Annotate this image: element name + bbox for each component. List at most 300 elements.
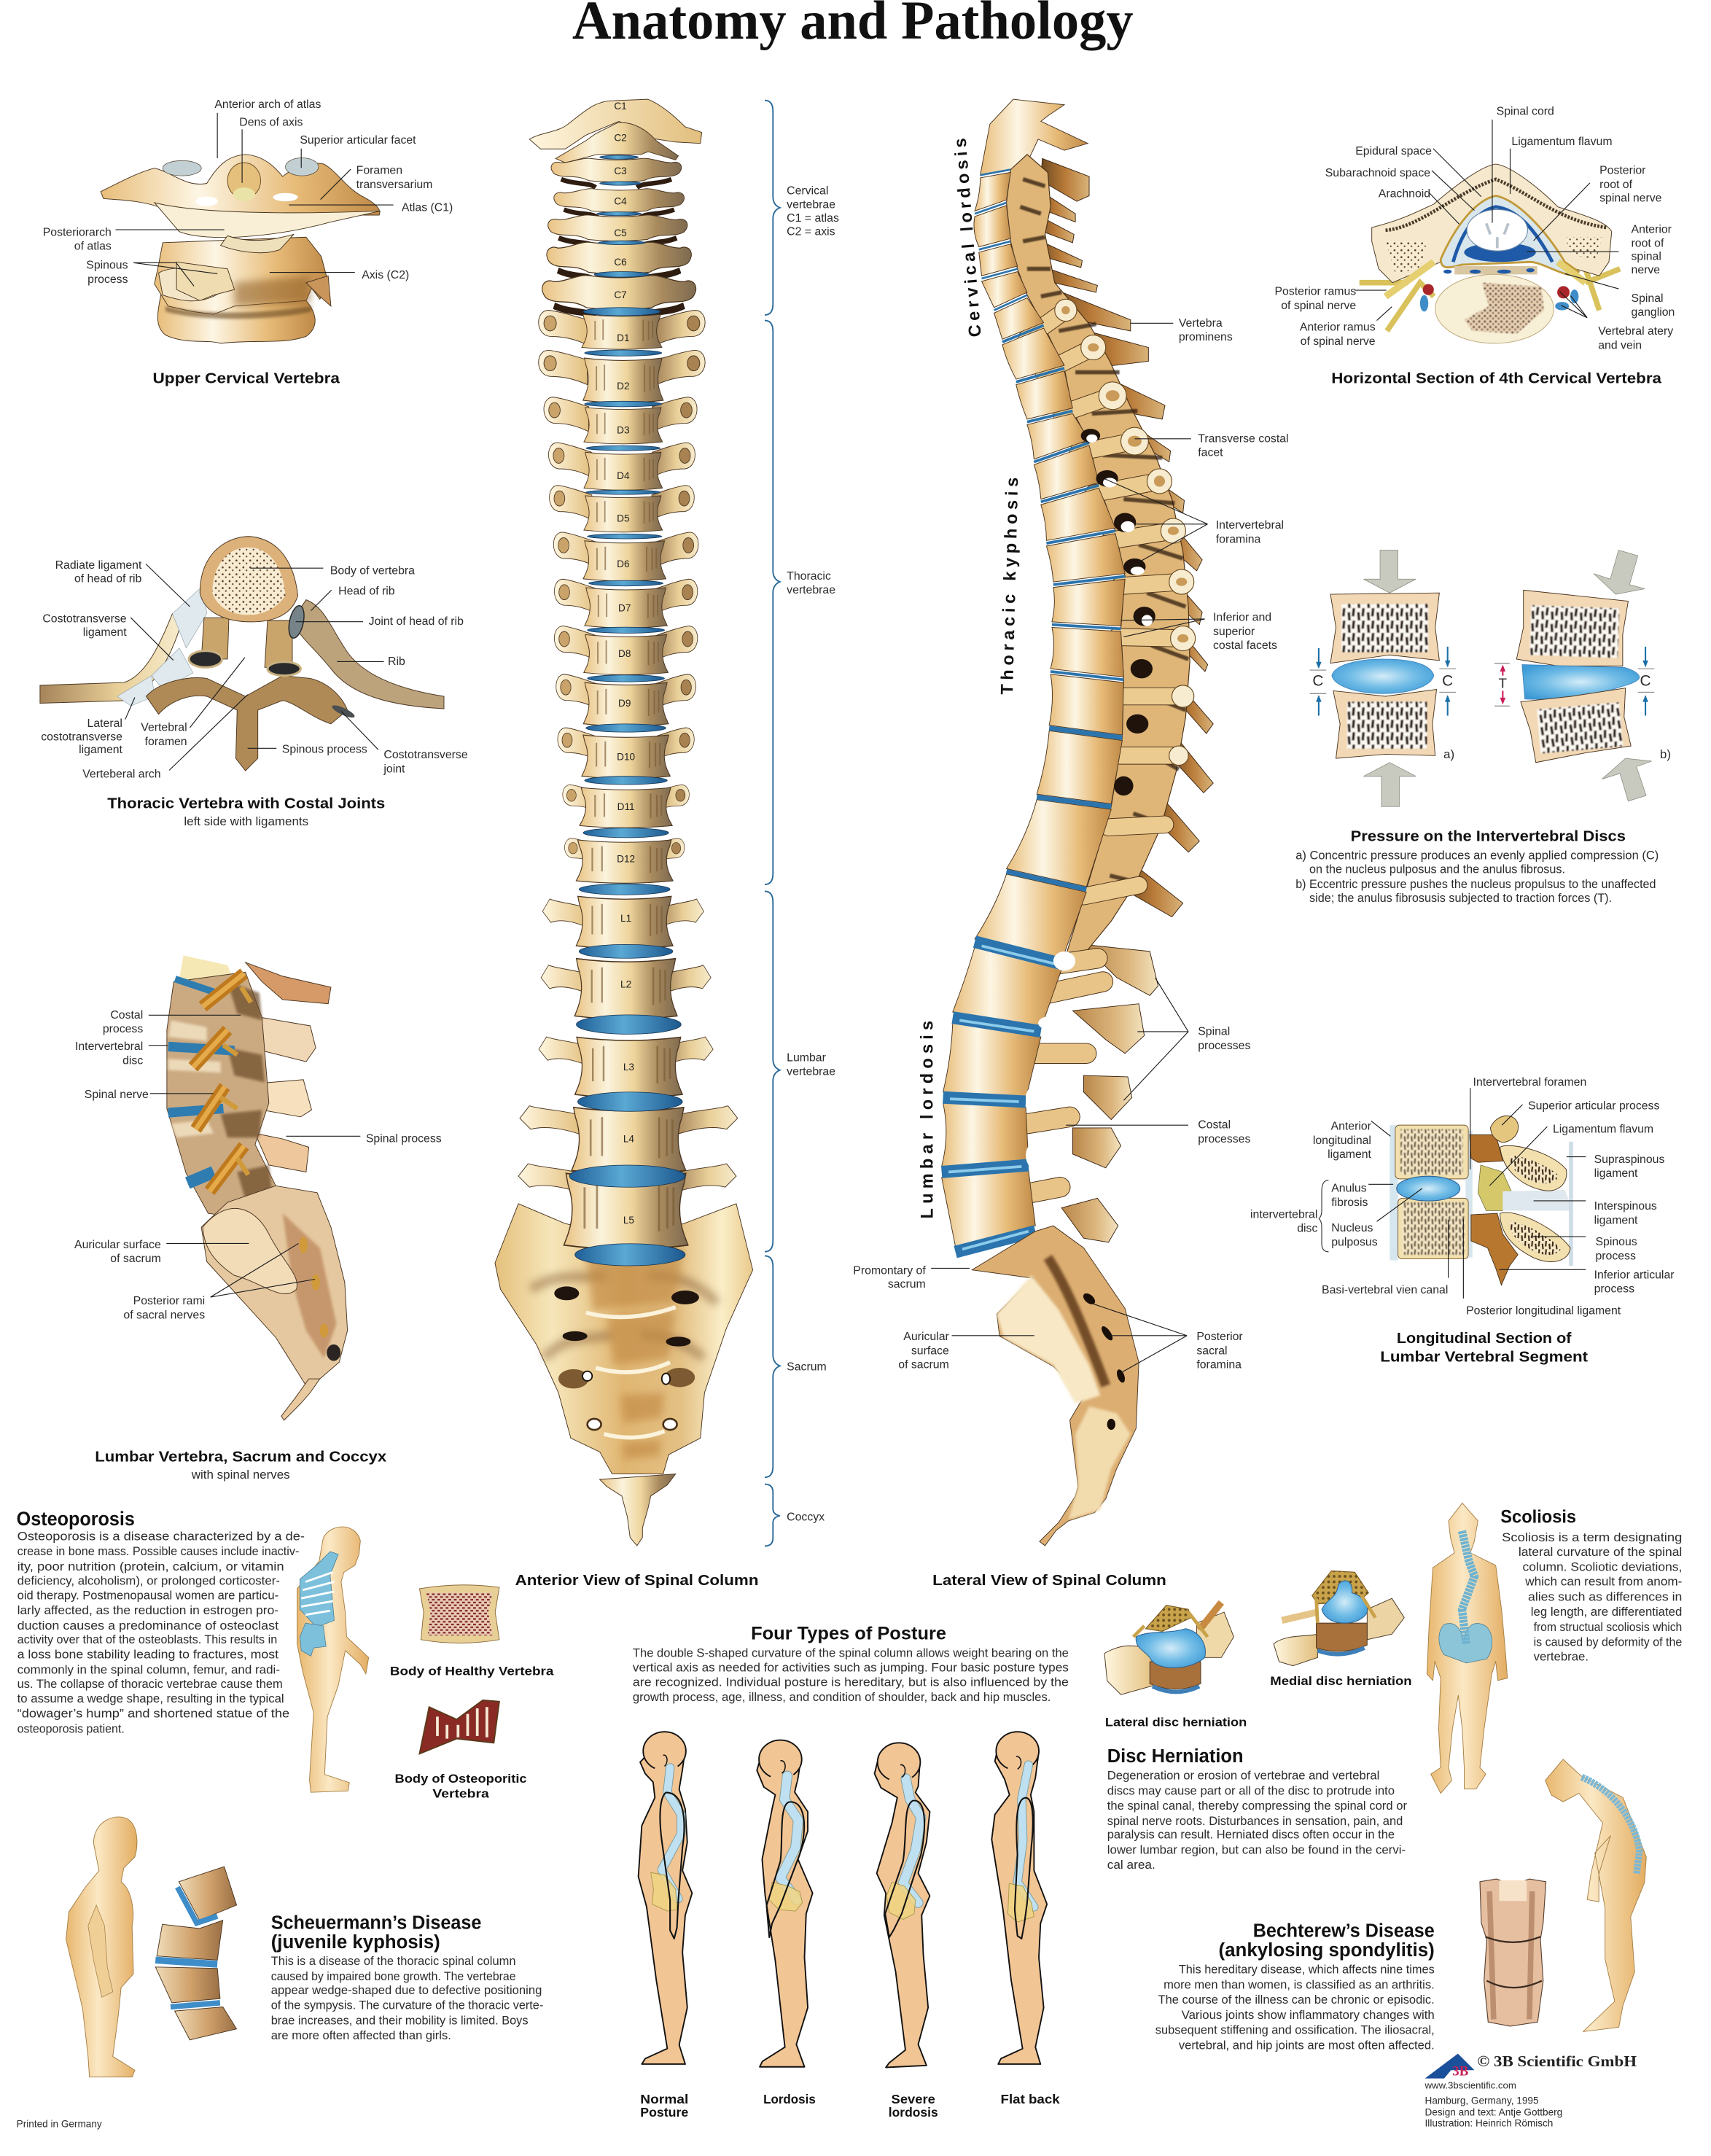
text block: osteoporosis: osteoporosis patient. — [17, 1722, 125, 1735]
compression markers: C — [1442, 673, 1453, 690]
label: costal facets: superior — [1213, 625, 1255, 637]
vertebra letters: L5 — [623, 1215, 634, 1226]
label: subarachnoid space: Subarachnoid space — [1325, 167, 1430, 179]
label: radiate ligament: of head of rib — [74, 572, 142, 585]
compression markers: a) — [1443, 747, 1454, 761]
text block: scoliosis: from structual scoliosis which — [1534, 1621, 1682, 1634]
label: anterior ramus: Anterior ramus — [1300, 322, 1376, 334]
text block: posture: growth process, age, illness, and condition of shoulder, back and hip muscles. — [633, 1691, 1051, 1704]
text block: pressure explanation — [1295, 849, 1659, 905]
text block: scoliosis: which can result from anom- — [1524, 1576, 1682, 1589]
label: vertebra prominens: Vertebra — [1179, 317, 1223, 330]
text: printed in germany: Printed in Germany — [17, 2118, 102, 2129]
label: severe lordosis: Severe — [892, 2092, 935, 2106]
label: lateral costotransverse ligament: ligament — [79, 744, 123, 756]
heading: thoracic vertebra: Thoracic Vertebra with Costal Joints — [107, 795, 385, 812]
label: normal posture: Normal — [640, 2092, 688, 2106]
text block: scoliosis: is caused by deformity of the — [1534, 1636, 1682, 1649]
label: verteberal arch: Verteberal arch — [82, 768, 161, 781]
text block: osteoporosis: us. The collapse of thoracic vertebrae cause them — [17, 1678, 283, 1691]
label: posterior sacral foramina: sacral — [1196, 1344, 1228, 1357]
icon: 3B logo: 3B — [1452, 2064, 1469, 2079]
text block: osteoporosis: a loss bone stability leading to fractures, most — [17, 1649, 279, 1662]
label: costal processes: Costal — [1198, 1119, 1231, 1132]
icon: 3B logo — [1425, 2054, 1474, 2079]
illustration: horizontal section — [1360, 164, 1620, 343]
text block: scoliosis: lateral curvature of the spinal — [1519, 1546, 1682, 1559]
illustration: anterior spine — [495, 99, 753, 1546]
text block: disc herniation: lower lumbar region, but can also be found in the cervi- — [1107, 1843, 1406, 1856]
label: rib: Rib — [388, 655, 405, 668]
brace: lumbar — [765, 891, 780, 1252]
text block: Scheuermann's disease: This is a disease of the thoracic spinal column — [271, 1955, 516, 1968]
label: cervical vertebrae: vertebrae — [787, 198, 835, 211]
heading: four types of posture: Four Types of Posture — [751, 1624, 946, 1644]
illustration: atlas and axis — [101, 155, 381, 343]
label: vertebral artery: and vein — [1598, 339, 1642, 351]
vertebra letters: C6 — [614, 257, 627, 268]
illustration: wedge vertebrae — [155, 1867, 237, 2040]
label: posterior rami: Posterior rami — [133, 1295, 205, 1307]
subheading: with spinal nerves: with spinal nerves — [191, 1468, 290, 1482]
vertebra letters: C5 — [614, 227, 627, 238]
illustration: thoracic vertebra — [40, 537, 444, 771]
label: costotransverse joint: joint — [383, 763, 405, 775]
label: posterior ramus: of spinal nerve — [1281, 299, 1356, 311]
panel: lumbar vertebra, sacrum and coccyx — [74, 956, 442, 1482]
brace: thoracic — [765, 321, 780, 884]
text block: pressure explanation: a) Concentric pressure produces an evenly applied compression (C) — [1295, 849, 1659, 862]
heading: upper cervical vertebra: Upper Cervical Vertebra — [152, 370, 340, 386]
label: foramen transversarium: transversarium — [356, 178, 432, 190]
label: flat back: Flat back — [1001, 2092, 1060, 2106]
label: arachnoid: Arachnoid — [1379, 188, 1430, 201]
heading: Scheuermann's disease — [271, 1912, 481, 1953]
text: location and year: Hamburg, Germany, 1995 — [1425, 2095, 1539, 2106]
compression markers — [1310, 647, 1671, 761]
text block: Bechterew's disease: The course of the illness can be chronic or episodic. — [1158, 1993, 1435, 2007]
vertebra letters: D8 — [618, 648, 631, 659]
text block: osteoporosis: deficiency, alcoholism), or prolonged corticoster- — [17, 1575, 280, 1588]
text block: scoliosis: alies such as differences in — [1528, 1590, 1682, 1603]
illustration: medial disc herniation — [1274, 1571, 1404, 1666]
panel: scoliosis — [1427, 1503, 1682, 1794]
panel: publisher credit — [1424, 2054, 1637, 2128]
heading: longitudinal section: Longitudinal Section of — [1397, 1330, 1572, 1347]
illustration: hunched figure — [297, 1527, 369, 1792]
label: thoracic kyphosis: Thoracic kyphosis — [997, 477, 1021, 695]
label: anterior root: nerve — [1632, 263, 1660, 276]
heading: horizontal section: Horizontal Section of 4th Cervical Vertebra — [1331, 370, 1662, 386]
illustration: bent figure — [1546, 1759, 1646, 2031]
label: vertebra prominens: prominens — [1179, 331, 1233, 343]
text block: Bechterew's disease — [1155, 1964, 1435, 2052]
label: costal processes: processes — [1198, 1133, 1250, 1145]
panel: disc herniation — [1104, 1571, 1412, 1872]
vertebra letters: C7 — [614, 289, 627, 300]
panel: horizontal section of 4th cervical vertebra — [1274, 105, 1675, 386]
heading: anterior view: Anterior View of Spinal Column — [515, 1572, 758, 1589]
brace: intervertebral disc — [1319, 1180, 1328, 1252]
vertebra letters: D2 — [617, 381, 630, 392]
illustration: longitudinal section — [1390, 1116, 1573, 1285]
label: posterior root: spinal nerve — [1599, 192, 1662, 204]
label: interspinous ligament: Interspinous — [1594, 1200, 1657, 1213]
text block: scoliosis — [1502, 1531, 1682, 1663]
spinous processes — [1035, 158, 1213, 917]
label: anterior arch of atlas: Anterior arch of atlas — [214, 98, 321, 111]
label: anterior root: root of — [1632, 237, 1664, 249]
text: copyright: © 3B Scientific GmbH — [1477, 2054, 1637, 2070]
label: intervertebral foramina: Intervertebral — [1216, 519, 1284, 532]
label: spinous process: process — [87, 273, 128, 285]
label: coccyx: Coccyx — [787, 1511, 825, 1523]
label: cervical vertebrae: C1 = atlas — [787, 212, 839, 225]
vertebra letters: D11 — [617, 801, 635, 812]
text block: pressure explanation: on the nucleus pulposus and the anulus fibrosus. — [1309, 863, 1565, 876]
text block: Bechterew's disease: vertebral, and hip joints are most often affected. — [1179, 2039, 1435, 2052]
text block: disc herniation: the spinal canal, thereby compressing the spinal cord or — [1107, 1799, 1408, 1813]
label: cervical vertebrae: C2 = axis — [787, 225, 835, 238]
text block: osteoporosis: Osteoporosis is a disease characterized by a de- — [17, 1530, 305, 1543]
heading: disc herniation: Disc Herniation — [1107, 1746, 1244, 1767]
label: lateral costotransverse ligament: Lateral — [87, 717, 122, 730]
compression markers: C — [1312, 673, 1323, 690]
label: spinal processes: Spinal — [1198, 1025, 1230, 1038]
label: spinal nerve: Spinal nerve — [85, 1089, 149, 1101]
vertebra letters: D5 — [617, 513, 630, 524]
label: intervertebral disc: Intervertebral — [75, 1040, 143, 1053]
illustration: bent figure — [66, 1817, 137, 2077]
compression markers: b) — [1660, 747, 1671, 761]
text block: osteoporosis: duction causes a predominance of osteoclast — [17, 1619, 279, 1632]
brace: sacrum — [765, 1256, 780, 1477]
posterior elements mass — [1007, 155, 1190, 969]
label: spinal process: Spinal process — [366, 1133, 442, 1145]
label: posterior rami: of sacral nerves — [123, 1309, 205, 1321]
vertebra letters: D12 — [617, 854, 635, 865]
illustration: lateral lumbar sacrum with nerves — [167, 956, 348, 1420]
label: joint of head of rib: Joint of head of rib — [369, 615, 464, 628]
label: posterior ramus: Posterior ramus — [1274, 285, 1356, 297]
label: posterior root: root of — [1599, 178, 1633, 190]
label: basi-vertebral vein canal: Basi-vertebral vien canal — [1322, 1284, 1448, 1296]
label: intervertebral foramen: Intervertebral foramen — [1473, 1076, 1586, 1089]
text block: Scheuermann's disease: brae increases, and their mobility is limited. Boys — [271, 2014, 528, 2027]
label: severe lordosis — [889, 2092, 938, 2120]
text block: Scheuermann's disease: of the sympysis. The curvature of the thoracic verte- — [271, 1999, 543, 2012]
text block: pressure explanation: b) Eccentric pressure pushes the nucleus propulsus to the unaffected — [1295, 878, 1656, 891]
panel: lateral view of spinal column — [853, 99, 1289, 1589]
sacrum — [495, 1204, 753, 1474]
vertebra letters: L2 — [620, 979, 631, 990]
vertebra letters: D4 — [617, 470, 630, 481]
text block: disc herniation: Degeneration or erosion of vertebrae and vertebral — [1107, 1770, 1379, 1783]
label: lateral costotransverse ligament: costotransverse — [41, 731, 122, 743]
vertebra letters: C2 — [614, 133, 627, 144]
label: spinal processes: processes — [1198, 1039, 1250, 1051]
text block: osteoporosis: oid therapy. Postmenopausal women are particu- — [17, 1589, 278, 1602]
vertebra letters: C4 — [614, 196, 627, 207]
vertebra letters: L3 — [623, 1062, 634, 1073]
label: nucleus pulposus: pulposus — [1331, 1236, 1378, 1248]
label: anterior longitudinal ligament: longitudinal — [1313, 1134, 1371, 1146]
label: inferior articular process: Inferior articular — [1594, 1269, 1675, 1281]
text block: osteoporosis: ity, poor nutrition (protein, calcium, or vitamin — [17, 1560, 284, 1573]
panel: longitudinal section of lumbar vertebral segment — [1250, 1076, 1675, 1366]
label: inferior articular process: process — [1594, 1283, 1634, 1295]
illustration: healthy vertebra — [419, 1585, 499, 1643]
label: costal facets: costal facets — [1213, 639, 1277, 651]
discs — [942, 170, 1125, 1252]
text block: disc herniation: spinal nerve roots. Disturbances in sensation, pain, and — [1107, 1815, 1403, 1828]
text block: osteoporosis: to assume a wedge shape, resulting in the typical — [17, 1692, 284, 1705]
text block: posture: The double S-shaped curvature of the spinal column allows weight bearing on the — [633, 1647, 1069, 1660]
label: cervical lordosis: Cervical lordosis — [951, 137, 985, 338]
label: severe lordosis: lordosis — [889, 2105, 938, 2120]
label: lateral disc herniation: Lateral disc herniation — [1105, 1715, 1247, 1729]
label: costal facets: Inferior and — [1213, 612, 1271, 624]
label: body of vertebra: Body of vertebra — [330, 564, 415, 577]
text block: Scheuermann's disease: appear wedge-shaped due to defective positioning — [271, 1984, 542, 1997]
label: osteoporotic vertebra: Vertebra — [432, 1787, 489, 1801]
label: osteoporotic vertebra — [395, 1772, 527, 1801]
text block: osteoporosis: crease in bone mass. Possible causes include inactiv- — [17, 1545, 299, 1558]
label: cervical vertebrae: Cervical — [787, 185, 828, 198]
compression markers: T — [1499, 676, 1508, 691]
arrow: top compression a — [1363, 550, 1416, 593]
label: spinal ganglion: ganglion — [1632, 306, 1675, 319]
label: intervertebral disc: disc — [122, 1054, 143, 1067]
label: lumbar vertebrae: vertebrae — [787, 1065, 835, 1078]
heading: osteoporosis: Osteoporosis — [17, 1508, 135, 1530]
illustration: lateral disc herniation — [1104, 1603, 1233, 1694]
text block: posture: are recognized. Individual posture is hereditary, but is also influenced by the — [633, 1676, 1069, 1689]
label: ligamentum flavum: Ligamentum flavum — [1511, 136, 1613, 148]
label: costotransverse ligament: ligament — [83, 626, 127, 638]
label: anterior root: spinal — [1632, 250, 1661, 262]
text block: scoliosis: Scoliosis is a term designating — [1502, 1531, 1682, 1544]
label: lumbar lordosis: Lumbar lordosis — [918, 1021, 937, 1218]
label: auricular surface: of sacrum — [898, 1358, 949, 1371]
label: vertebral artery: Vertebral atery — [1598, 325, 1673, 338]
panel: upper cervical vertebra — [43, 98, 453, 386]
label: anterior ramus: of spinal nerve — [1301, 335, 1376, 347]
vertebra letters: L4 — [623, 1134, 634, 1145]
text: website: www.3bscientific.com — [1424, 2080, 1516, 2091]
illustration b: eccentric pressure — [1516, 590, 1640, 763]
brace: coccyx — [765, 1484, 780, 1546]
label: promontary: sacrum — [888, 1278, 926, 1291]
heading: Scheuermann's disease: Scheuermann’s Disease — [271, 1912, 481, 1933]
posterior shadows — [1020, 179, 1188, 882]
heading: scoliosis: Scoliosis — [1500, 1507, 1576, 1527]
text block: Bechterew's disease: Various joints show inflammatory changes with — [1182, 2009, 1435, 2022]
label: supraspinous ligament: Supraspinous — [1594, 1153, 1664, 1166]
text block: scoliosis: vertebrae. — [1534, 1650, 1589, 1663]
compression markers: C — [1640, 673, 1651, 690]
label: foramen transversarium: Foramen — [356, 164, 402, 176]
label: spinal ganglion: Spinal — [1632, 292, 1664, 305]
illustration: lateral spine — [942, 99, 1213, 1546]
label: intervertebral disc: intervertebral — [1250, 1208, 1317, 1221]
vertebra letters: C1 — [614, 101, 627, 112]
label: posterior root: Posterior — [1599, 164, 1645, 176]
label: anulus fibrosis: Anulus — [1331, 1182, 1367, 1194]
label: spinous process: process — [1595, 1250, 1636, 1262]
label: osteoporotic vertebra: Body of Osteoporitic — [395, 1772, 527, 1786]
panel: pressure on the intervertebral discs — [1295, 550, 1671, 905]
subheading: left side with ligaments: left side with ligaments — [184, 814, 308, 828]
label: dens of axis: Dens of axis — [239, 116, 303, 128]
leader lines — [125, 564, 383, 770]
heading: lumbar vertebra: Lumbar Vertebra, Sacrum and Coccyx — [95, 1448, 387, 1465]
lateral sacrum and coccyx — [972, 1226, 1139, 1546]
vertebra letters: D1 — [617, 332, 630, 343]
label: sacrum: Sacrum — [787, 1361, 827, 1374]
text block: scoliosis: leg length, are differentiated — [1531, 1606, 1682, 1619]
text block: Scheuermann's disease: are more often affected than girls. — [271, 2029, 451, 2042]
text block: pressure explanation: side; the anulus fibrosusis subjected to traction forces (T). — [1309, 892, 1612, 905]
arrow: bottom compression a — [1363, 763, 1416, 806]
label: intervertebral disc: disc — [1297, 1222, 1317, 1234]
label: costal process: process — [103, 1023, 143, 1035]
label: supraspinous ligament: ligament — [1594, 1167, 1638, 1180]
label: posterior sacral foramina: foramina — [1196, 1358, 1242, 1371]
text block: Bechterew's disease: This hereditary disease, which affects nine times — [1179, 1964, 1435, 1977]
heading: Bechterew's disease: (ankylosing spondylitis) — [1219, 1940, 1435, 1961]
knob facets — [1055, 299, 1196, 766]
label: spinous process: Spinous — [86, 260, 128, 272]
label: nucleus pulposus: Nucleus — [1331, 1222, 1373, 1234]
vertebra letters: D3 — [617, 425, 630, 436]
figure: lordosis — [757, 1740, 813, 2067]
text block: disc herniation — [1107, 1770, 1408, 1872]
label: auricular surface: Auricular surface — [74, 1239, 161, 1251]
label: intervertebral foramina: foramina — [1216, 533, 1261, 545]
label: posterior arch of atlas: of atlas — [74, 240, 112, 252]
vertebra letters: L1 — [620, 913, 631, 924]
label: ligamentum flavum: Ligamentum flavum — [1553, 1123, 1653, 1135]
pedicles and transverse knobs — [1024, 310, 1183, 1194]
label: posterior sacral foramina: Posterior — [1196, 1331, 1243, 1343]
vertebral bodies — [942, 172, 1125, 1247]
label: interspinous ligament: ligament — [1594, 1214, 1638, 1226]
illustration: ankylosed vertebral column — [1480, 1879, 1546, 2026]
leader lines — [116, 113, 394, 286]
text block: osteoporosis: commonly in the spinal column, femur, and radi- — [17, 1663, 280, 1676]
heading: longitudinal section — [1380, 1330, 1588, 1366]
label: anterior root: Anterior — [1632, 224, 1672, 236]
label: posterior arch of atlas: Posteriorarch — [43, 226, 112, 238]
label: spinal cord: Spinal cord — [1497, 105, 1554, 117]
heading: Bechterew's disease — [1219, 1921, 1435, 1961]
figure: severe lordosis — [875, 1743, 929, 2068]
text: illustration credit: Illustration: Heinrich Römisch — [1425, 2117, 1553, 2128]
label: costotransverse joint: Costotransverse — [383, 749, 468, 761]
label: lumbar vertebrae: Lumbar — [787, 1051, 826, 1064]
coccyx — [600, 1474, 676, 1546]
heading: lateral view: Lateral View of Spinal Column — [932, 1572, 1166, 1589]
label: anterior longitudinal ligament: Anterior — [1331, 1121, 1371, 1133]
label: anulus fibrosis: fibrosis — [1331, 1196, 1368, 1208]
text block: scoliosis: column. Scoliotic deviations, — [1522, 1561, 1682, 1574]
text block: posture: vertical axis as needed for activities such as jumping. Four basic posture types — [633, 1661, 1069, 1674]
vertebra C2 axis — [556, 122, 678, 163]
figure: flat back — [991, 1732, 1047, 2064]
illustration a: concentric pressure — [1330, 593, 1439, 758]
text block: disc herniation: cal area. — [1107, 1859, 1155, 1872]
label: auricular surface: of sacrum — [110, 1253, 161, 1265]
vertebra letters: D9 — [618, 698, 631, 709]
leader lines — [1355, 120, 1619, 321]
panel: Bechterew's disease — [1155, 1759, 1646, 2052]
thoracic wings and bodies — [539, 310, 705, 883]
vertebra letters: D7 — [618, 602, 631, 613]
heading: longitudinal section: Lumbar Vertebral Segment — [1380, 1349, 1588, 1366]
illustration: osteoporotic vertebra — [419, 1700, 499, 1754]
label: superior articular facet: Superior articular facet — [300, 134, 416, 147]
leader lines — [931, 323, 1207, 1373]
lumbar wings and bodies — [518, 896, 738, 1193]
vertebra letters: C3 — [614, 166, 627, 176]
vertebra C1 atlas — [529, 99, 702, 149]
label: head of rib: Head of rib — [338, 585, 395, 598]
label: posterior longitudinal ligament: Posterior longitudinal ligament — [1466, 1304, 1621, 1317]
label: healthy vertebra: Body of Healthy Vertebra — [390, 1665, 554, 1678]
text block: osteoporosis — [17, 1530, 305, 1735]
vertebra letters — [614, 101, 636, 1226]
figure: normal posture — [639, 1732, 692, 2064]
foramina — [1081, 429, 1155, 795]
panel: thoracic vertebra with costal joints — [40, 537, 468, 828]
label: auricular surface: surface — [911, 1344, 949, 1357]
label: lordosis: Lordosis — [763, 2092, 816, 2106]
label: anterior longitudinal ligament: ligament — [1328, 1148, 1372, 1160]
illustration: scoliosis figure — [1427, 1503, 1508, 1794]
cervical vertebrae C3 to C7 — [542, 158, 696, 318]
label: normal posture: Posture — [640, 2105, 688, 2120]
text block: disc herniation: discs may cause part or all of the disc to protrude into — [1107, 1784, 1395, 1797]
arrow: top compression b — [1594, 550, 1645, 594]
text block: Scheuermann's disease: caused by impaired bone growth. The vertebrae — [271, 1970, 516, 1983]
label: spinous process: Spinous — [1595, 1236, 1637, 1248]
panel: osteoporosis — [17, 1508, 554, 1801]
heading: Bechterew's disease: Bechterew’s Disease — [1253, 1921, 1435, 1942]
vertebra letters: D6 — [617, 559, 630, 569]
L5 body — [564, 1173, 688, 1249]
label: axis C2: Axis (C2) — [362, 269, 409, 281]
label: thoracic vertebrae: vertebrae — [787, 583, 835, 596]
text block: disc herniation: paralysis can result. Herniated discs often occur in the — [1107, 1829, 1395, 1842]
heading: Scheuermann's disease: (juvenile kyphosis) — [271, 1932, 440, 1953]
brace: cervical — [765, 101, 780, 315]
panel: anterior view of spinal column — [495, 99, 839, 1589]
intervertebral discs — [569, 155, 685, 1266]
text block: osteoporosis: larly affected, as the reduction in estrogen pro- — [17, 1604, 278, 1617]
label: normal posture — [640, 2092, 688, 2120]
text block: osteoporosis: activity over that of the osteoblasts. This results in — [17, 1633, 277, 1646]
panel: four types of posture — [633, 1624, 1069, 2120]
text block: Bechterew's disease: subsequent stiffening and ossification. The iliosacral, — [1155, 2024, 1435, 2037]
label: promontary: Promontary of — [853, 1265, 926, 1277]
leader lines — [1368, 1088, 1586, 1299]
text block: Scheuermann's disease — [271, 1955, 543, 2042]
label: spinous process: Spinous process — [282, 744, 367, 756]
heading: pressure: Pressure on the Intervertebral Discs — [1351, 828, 1626, 845]
text block: osteoporosis: “dowager’s hump” and shortened statue of the — [17, 1708, 289, 1721]
top of cervical spine — [981, 99, 1088, 175]
